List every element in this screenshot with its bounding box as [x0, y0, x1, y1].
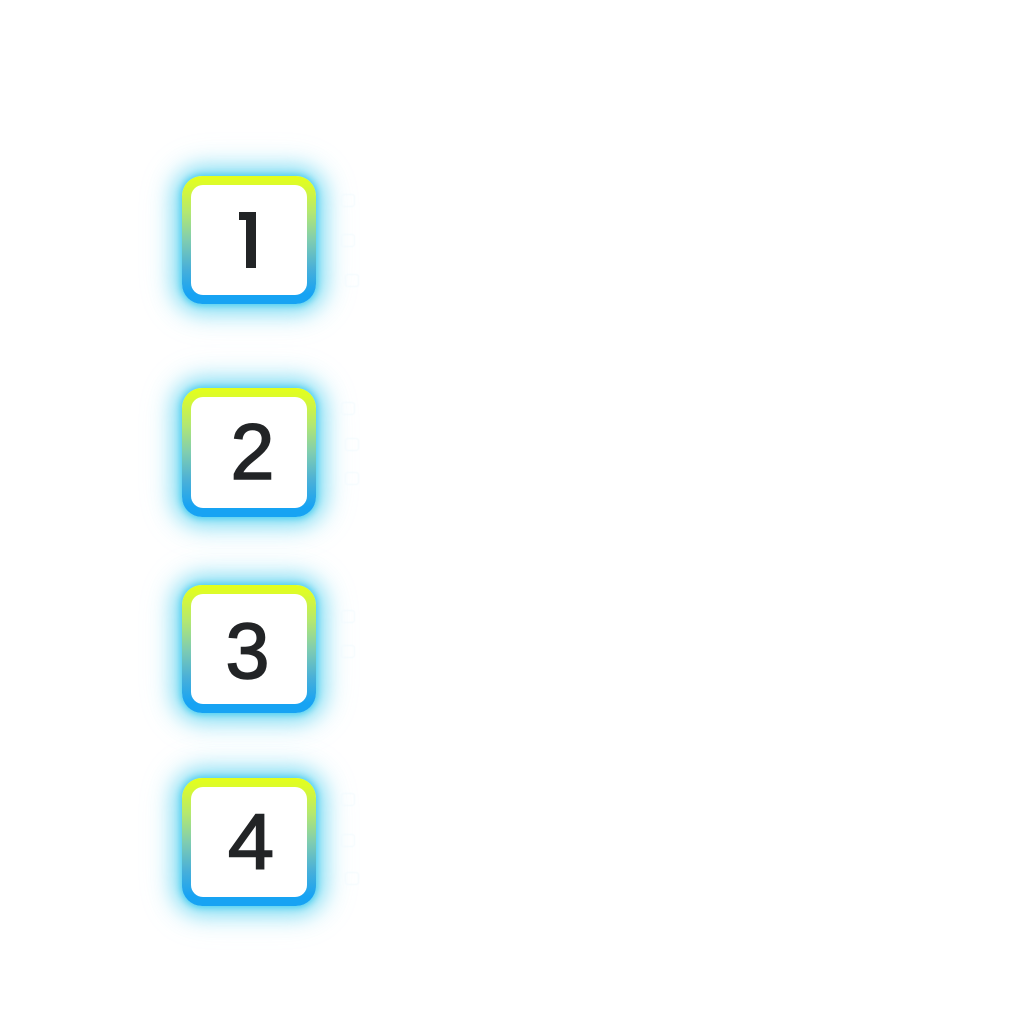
- faint text placeholders: [355, 484, 356, 485]
- card 1: [182, 176, 316, 304]
- number 3: 3: [226, 606, 269, 695]
- number 2: 2: [231, 406, 274, 496]
- number 1: 1: [227, 195, 271, 284]
- number 1: [239, 212, 256, 268]
- card 2: [182, 388, 316, 517]
- card 3: [182, 585, 316, 713]
- number 4: 4: [227, 797, 274, 886]
- card 4: [182, 778, 316, 906]
